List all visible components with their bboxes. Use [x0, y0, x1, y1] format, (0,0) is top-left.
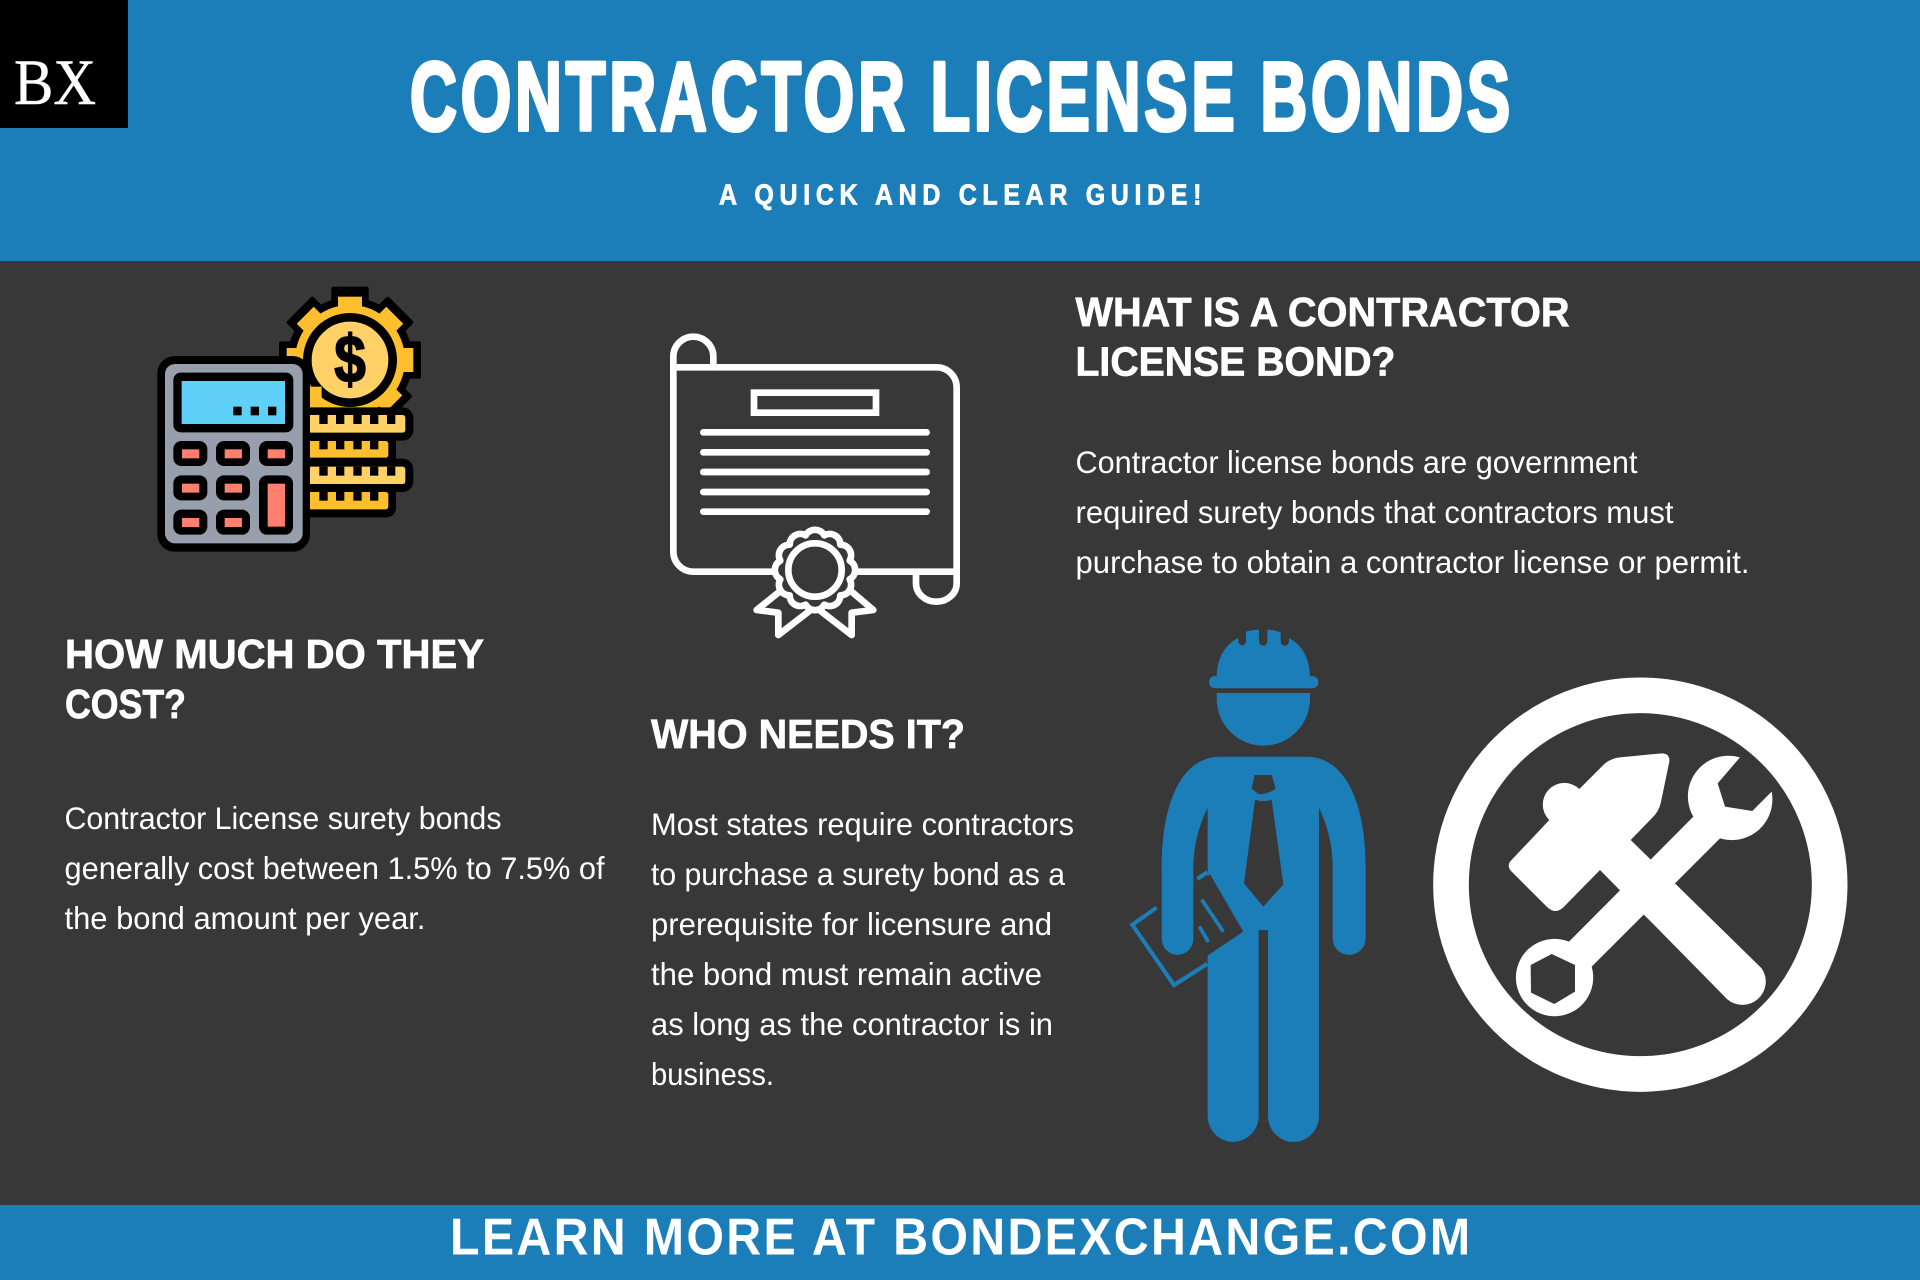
panel: who needs it [651, 711, 1074, 1092]
logo: BX: BX [14, 47, 96, 119]
body text: Contractor License surety bonds [64, 800, 502, 836]
icon: certificate with seal [673, 337, 957, 635]
title: CONTRACTOR LICENSE BONDS [410, 43, 1510, 151]
header band [0, 0, 1920, 261]
clipboard [1207, 874, 1243, 956]
body text: purchase to obtain a contractor license or permit. [1076, 544, 1750, 580]
icon: contractor figure with hard hat [1132, 630, 1366, 1142]
calculator body [157, 356, 310, 552]
body text: as long as the contractor is in [651, 1006, 1053, 1042]
hard hat [1217, 630, 1310, 679]
heading [65, 631, 484, 727]
body [1162, 757, 1366, 1142]
heading: WHAT IS A CONTRACTOR [1076, 289, 1570, 335]
coin stack [300, 387, 413, 517]
body text: business. [651, 1056, 774, 1092]
body text: Contractor license bonds are government [1076, 444, 1638, 480]
gear [279, 287, 421, 423]
body text [1076, 444, 1750, 580]
subtitle: A QUICK AND CLEAR GUIDE! [719, 179, 1201, 211]
footer call to action: LEARN MORE AT BONDEXCHANGE.COM [450, 1208, 1470, 1266]
body text: required surety bonds that contractors must [1076, 494, 1674, 530]
wrench [1516, 756, 1772, 1016]
tie [1207, 775, 1283, 956]
heading [1076, 289, 1570, 384]
heading: LICENSE BOND? [1076, 338, 1396, 384]
heading: WHO NEEDS IT? [651, 711, 965, 757]
body text: the bond amount per year. [64, 900, 426, 936]
body text: to purchase a surety bond as a [651, 856, 1065, 892]
gear: $ [334, 323, 366, 397]
body text: prerequisite for licensure and [651, 906, 1052, 942]
body text: generally cost between 1.5% to 7.5% of [64, 850, 605, 886]
icon: calculator with coins and dollar gear [157, 287, 421, 552]
hammer [1509, 753, 1766, 1005]
ring [1451, 695, 1830, 1074]
icon: hammer and wrench in circle [1451, 695, 1830, 1074]
body text: the bond must remain active [651, 956, 1042, 992]
body text [64, 800, 605, 936]
body text [651, 806, 1074, 1092]
panel: how much do they cost [64, 631, 605, 936]
footer band [0, 1205, 1920, 1280]
panel: what is a contractor license bond [1076, 289, 1750, 580]
body text: Most states require contractors [651, 806, 1074, 842]
heading: HOW MUCH DO THEY [65, 631, 484, 677]
logo: BX [0, 0, 128, 128]
head [1217, 693, 1310, 746]
heading: COST? [65, 681, 186, 727]
